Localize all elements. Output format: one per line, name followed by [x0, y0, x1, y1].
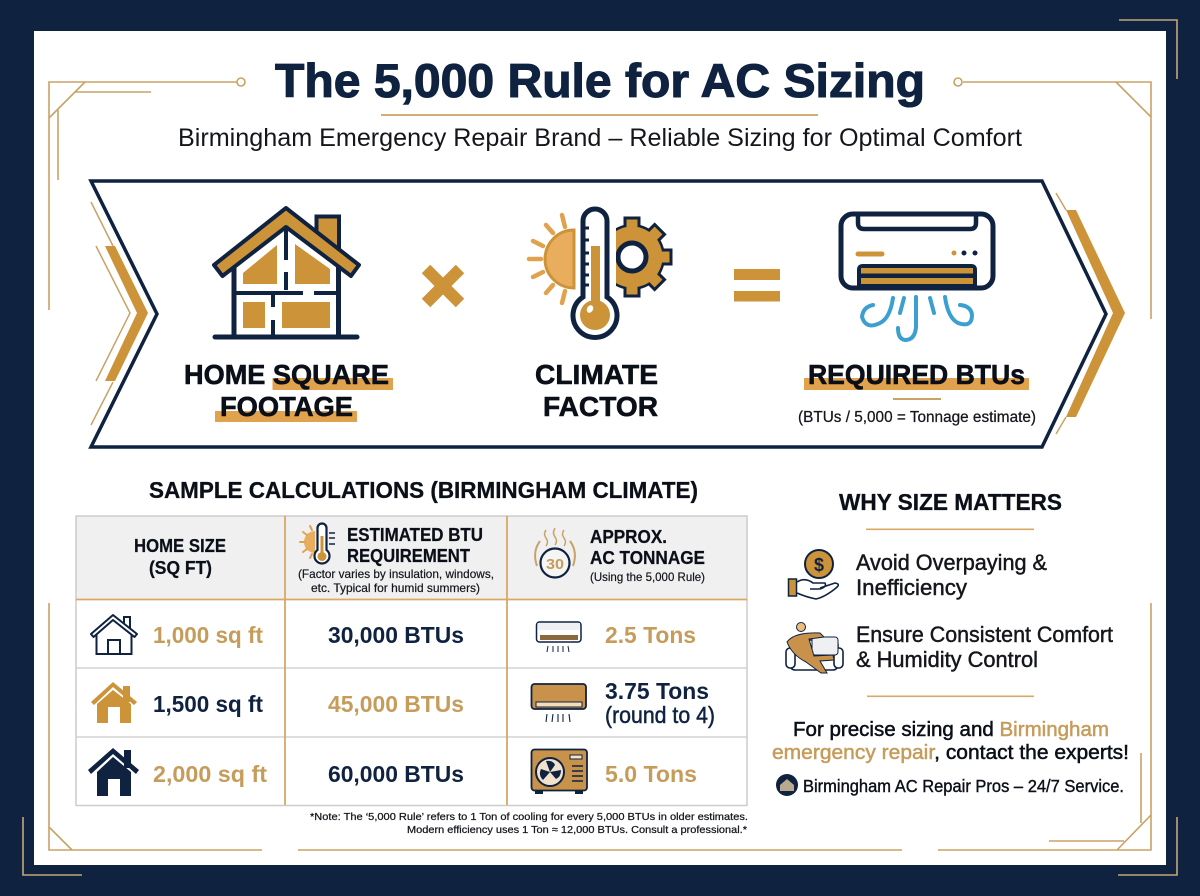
column header: estimated BTU: REQUIREMENT — [347, 545, 471, 566]
icon: hand holding coin: $ — [814, 555, 824, 575]
label: home square footage: FOOTAGE — [220, 391, 353, 422]
row: 1,500 sq ft: (round to 4) — [605, 702, 715, 728]
label: required BTUs: (BTUs / 5,000 = Tonnage estimate) — [798, 409, 1036, 426]
title underline — [381, 114, 818, 116]
benefit: avoid overpaying: Avoid Overpaying & — [856, 550, 1047, 575]
row: 1,500 sq ft: 1,500 sq ft — [153, 691, 263, 717]
column header: home size: (SQ FT) — [149, 558, 212, 578]
row: 1,500 sq ft: 45,000 BTUs — [328, 691, 464, 717]
heading: why size matters: WHY SIZE MATTERS — [839, 489, 1062, 515]
column header: AC tonnage: (Using the 5,000 Rule) — [590, 570, 705, 584]
table: sample calculations — [76, 516, 747, 806]
row: 2,000 sq ft — [88, 748, 697, 796]
label: climate factor: CLIMATE — [535, 359, 658, 390]
brand line: Birmingham AC Repair Pros – 24/7 Service. — [803, 776, 1124, 796]
label: required BTUs: REQUIRED BTUs — [808, 359, 1025, 390]
benefit: avoid overpaying — [788, 550, 1047, 600]
row: 2,000 sq ft: 5.0 Tons — [605, 761, 697, 787]
icon: climate thermometer with sun and gear — [529, 209, 671, 337]
column header: home size — [134, 536, 226, 578]
icon: 30 heat badge — [535, 528, 575, 578]
label: climate factor: FACTOR — [543, 391, 658, 422]
footnote: Modern efficiency uses 1 Ton ≈ 12,000 BTUs. Consult a professional.* — [407, 824, 747, 836]
icon: multiply sign — [426, 269, 460, 303]
label: climate factor — [535, 359, 658, 422]
heading: sample calculations: SAMPLE CALCULATIONS (BIRMINGHAM CLIMATE) — [149, 477, 698, 503]
icon: wall air conditioner — [841, 214, 993, 340]
row: 1,000 sq ft: 30,000 BTUs — [328, 622, 464, 648]
column header: estimated BTU — [298, 524, 494, 595]
icon: 30 heat badge: 30 — [546, 556, 564, 573]
icon: outline house — [91, 615, 137, 654]
column header: AC tonnage — [535, 526, 705, 584]
icon: equals sign — [734, 269, 780, 302]
row: 1,500 sq ft — [91, 678, 715, 728]
column header: AC tonnage: APPROX. — [590, 526, 667, 547]
call to action — [772, 719, 1129, 764]
icon: gold house — [91, 682, 137, 723]
footnote: *Note: The ‘5,000 Rule’ refers to 1 Ton of cooling for every 5,000 BTUs in older estimates. — [310, 811, 748, 823]
row: 1,000 sq ft: 2.5 Tons — [605, 622, 696, 648]
icon: house cross-section — [214, 208, 359, 337]
row: 1,000 sq ft — [91, 615, 696, 654]
formula banner arrow — [91, 181, 1125, 447]
column header: estimated BTU: ESTIMATED BTU — [347, 524, 483, 545]
icon: brand badge — [776, 774, 798, 796]
column header: estimated BTU: (Factor varies by insulation, windows, — [298, 567, 494, 581]
subtitle: Birmingham Emergency Repair Brand – Reliable Sizing for Optimal Comfort — [178, 124, 1022, 152]
icon: hand holding coin — [788, 550, 838, 599]
benefit: consistent comfort: & Humidity Control — [856, 647, 1038, 672]
benefit: consistent comfort: Ensure Consistent Comfort — [856, 622, 1113, 647]
footnote — [310, 811, 748, 836]
row: 1,500 sq ft: 3.75 Tons — [605, 678, 709, 704]
icon: small white AC — [536, 622, 581, 652]
row: 2,000 sq ft: 2,000 sq ft — [153, 761, 267, 787]
icon: navy house — [88, 748, 139, 796]
icon: small gold AC — [532, 684, 586, 722]
icon: small thermometer and sun — [300, 524, 335, 564]
title: The 5,000 Rule for AC Sizing — [275, 54, 925, 107]
row: 2,000 sq ft: 60,000 BTUs — [328, 761, 464, 787]
benefit: consistent comfort — [786, 622, 1113, 673]
column header: home size: HOME SIZE — [134, 536, 226, 556]
column header: AC tonnage: AC TONNAGE — [590, 547, 705, 568]
left chevrons — [91, 202, 148, 425]
row: 1,000 sq ft: 1,000 sq ft — [153, 622, 263, 648]
label: home square footage: HOME SQUARE — [184, 359, 389, 390]
label: required BTUs — [798, 359, 1036, 426]
icon: outdoor AC unit — [532, 750, 587, 794]
label: home square footage — [184, 359, 393, 422]
right chevrons — [1056, 193, 1125, 434]
benefit: avoid overpaying: Inefficiency — [856, 575, 967, 600]
column header: estimated BTU: etc. Typical for humid summers) — [311, 581, 480, 595]
call to action: emergency repair , contact the experts! — [772, 742, 1129, 764]
icon: person relaxing on sofa — [786, 622, 843, 673]
call to action: For precise sizing and Birmingham — [793, 719, 1109, 741]
